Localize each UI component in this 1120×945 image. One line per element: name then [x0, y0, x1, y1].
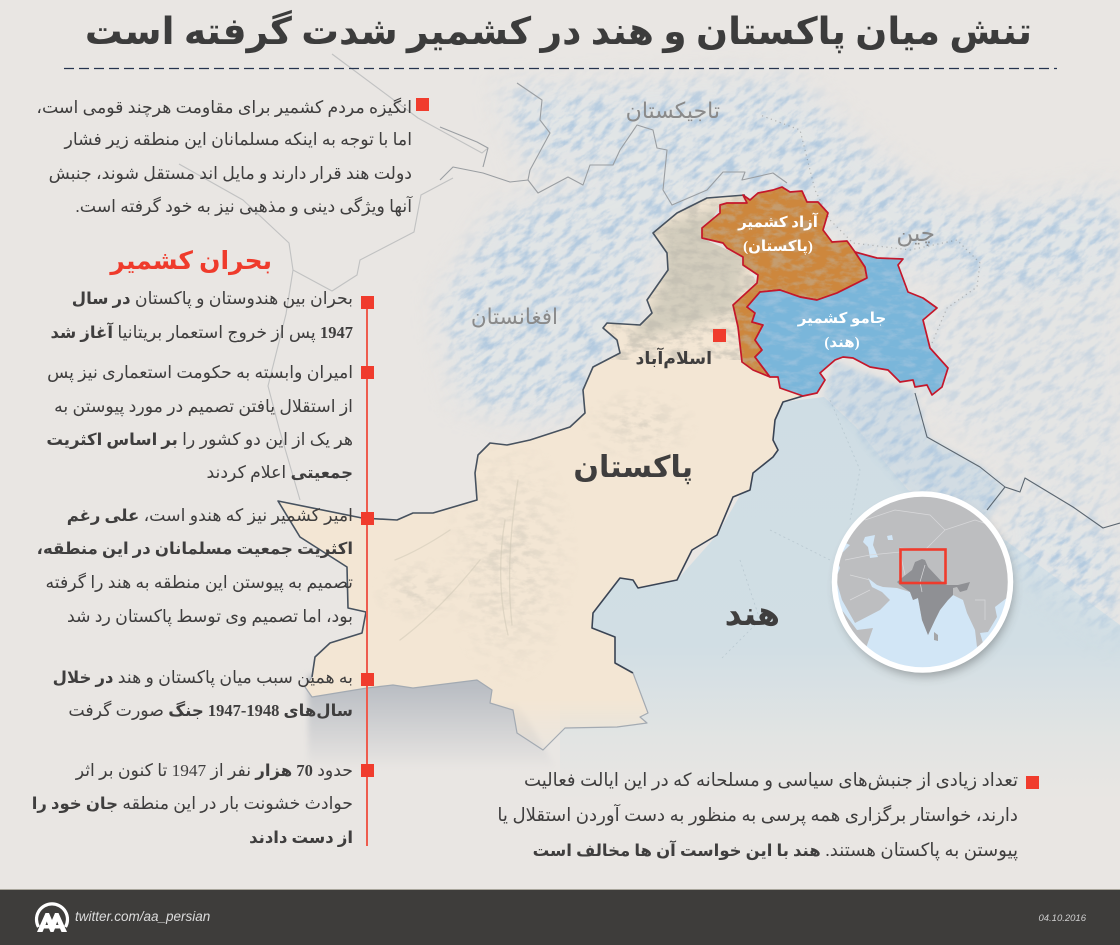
map label: India: هند: [725, 597, 780, 633]
inset locator rectangle: [900, 550, 946, 583]
text 2: امیران وابسته به حکومت استعماری نیز پس: [47, 363, 353, 382]
bottom paragraph: [497, 770, 1018, 860]
bullet 2: [361, 366, 374, 379]
bottom paragraph: پیوستن به پاکستان هستند. هند با این خواست آن ها مخالف است: [533, 840, 1018, 860]
text 3: امیر کشمیر نیز که هندو است، علی رغم: [67, 506, 353, 525]
intro paragraph: انگیزه مردم کشمیر برای مقاومت هرچند قومی است،: [36, 98, 412, 117]
timeline item 4: [53, 668, 374, 720]
map background: [178, 54, 1120, 756]
footer bar: [0, 889, 1120, 945]
intro paragraph: دولت هند قرار دارند و مایل اند مستقل شوند، جنبش: [49, 164, 412, 183]
map label: China: چین: [896, 221, 935, 246]
bottom paragraph: دارند، خواستار برگزاری همه پرسی به منظور به دست آوردن استقلال یا: [497, 805, 1018, 825]
Pakistan territory: [278, 190, 803, 750]
intro paragraph: [36, 98, 413, 216]
bullet 4: [361, 673, 374, 686]
map label: Islamabad: اسلام‌آباد: [636, 349, 712, 368]
heading: Kashmir crisis: بحران کشمیر: [110, 248, 272, 275]
inset globe: [825, 490, 1020, 676]
AA logo: [34, 902, 70, 932]
Arabian sea shading: [308, 665, 560, 775]
map label: Pakistan: پاکستان: [573, 451, 693, 484]
text 5: حوادث خشونت بار در این منطقه جان خود را: [32, 794, 353, 813]
map marker: Islamabad: [713, 329, 726, 342]
text 3: [37, 506, 353, 626]
bullet 1: [361, 296, 374, 309]
map label: Afghanistan: افغانستان: [471, 305, 558, 329]
bullet 3: [361, 512, 374, 525]
intro paragraph: آنها ویژگی دینی و مذهبی نیز به خود گرفته است.: [75, 197, 412, 216]
mountain terrain: [430, 70, 1120, 634]
timeline line: [366, 300, 368, 846]
text 2: جمعیتی اعلام کردند: [206, 463, 353, 482]
text 1: بحران بین هندوستان و پاکستان در سال: [72, 289, 353, 308]
text 3: تصمیم به پیوستن این منطقه به هند را گرفته: [46, 573, 353, 592]
intro paragraph: اما با توجه به اینکه مسلمانان این منطقه زیر فشار: [64, 130, 412, 149]
text 3: بود، اما تصمیم وی توسط پاکستان رد شد: [67, 607, 353, 626]
India plains: [560, 397, 1120, 800]
map label: Azad Kashmir: [738, 212, 818, 255]
intro bullet: [416, 98, 429, 111]
grey country borders: [179, 54, 1120, 660]
text 2: از استقلال یافتن تصمیم در مورد پیوستن به: [54, 397, 353, 416]
bottom paragraph: تعداد زیادی از جنبش‌های سیاسی و مسلحانه که در این ایالت فعالیت: [524, 770, 1018, 790]
text 4: [53, 668, 353, 720]
timeline item 3: [37, 506, 374, 626]
twitter handle: twitter.com/aa_persian: [75, 909, 210, 924]
text 2: هر یک از این دو کشور را بر اساس اکثریت: [46, 430, 353, 449]
text 5: حدود 70 هزار نفر از 1947 تا کنون بر اثر: [76, 761, 353, 780]
timeline item 1: [50, 289, 374, 342]
text 4: به همین سبب میان پاکستان و هند در خلال: [53, 668, 353, 687]
Pakistan border: [278, 195, 803, 750]
bottom bullet: [1026, 776, 1039, 789]
title: تنش میان پاکستان و هند در کشمیر شدت گرفته است: [85, 12, 1032, 53]
intro text panel: [36, 98, 429, 216]
text 1: [50, 289, 353, 342]
map label: Jammu Kashmir: جامو کشمیر: [798, 311, 886, 327]
text 2: [46, 363, 353, 482]
bottom text panel: [497, 770, 1039, 860]
bullet 5: [361, 764, 374, 777]
map label: Tajikistan: تاجیکستان: [626, 98, 720, 123]
text 5: از دست دادند: [249, 828, 353, 847]
map label: Jammu Kashmir: [797, 311, 886, 351]
map label: Azad Kashmir: آزاد کشمیر: [738, 215, 818, 231]
timeline item 5: [32, 761, 374, 847]
blue Himalaya foothill band: [824, 362, 1005, 525]
map label: Jammu Kashmir: (هند): [824, 335, 860, 351]
text 4: سال‌های 1948-1947 جنگ صورت گرفت: [68, 701, 353, 720]
text 5: [32, 761, 353, 847]
region: Jammu Kashmir: [745, 250, 950, 400]
region: Azad Kashmir: [700, 185, 870, 380]
text 3: اکثریت جمعیت مسلمانان در این منطقه،: [37, 539, 353, 558]
date: 04.10.2016: [1038, 913, 1086, 924]
timeline item 2: [46, 363, 374, 482]
text 1: 1947 پس از خروج استعمار بریتانیا آغاز شد: [50, 323, 353, 342]
map label: Azad Kashmir: (پاکستان): [743, 239, 813, 255]
